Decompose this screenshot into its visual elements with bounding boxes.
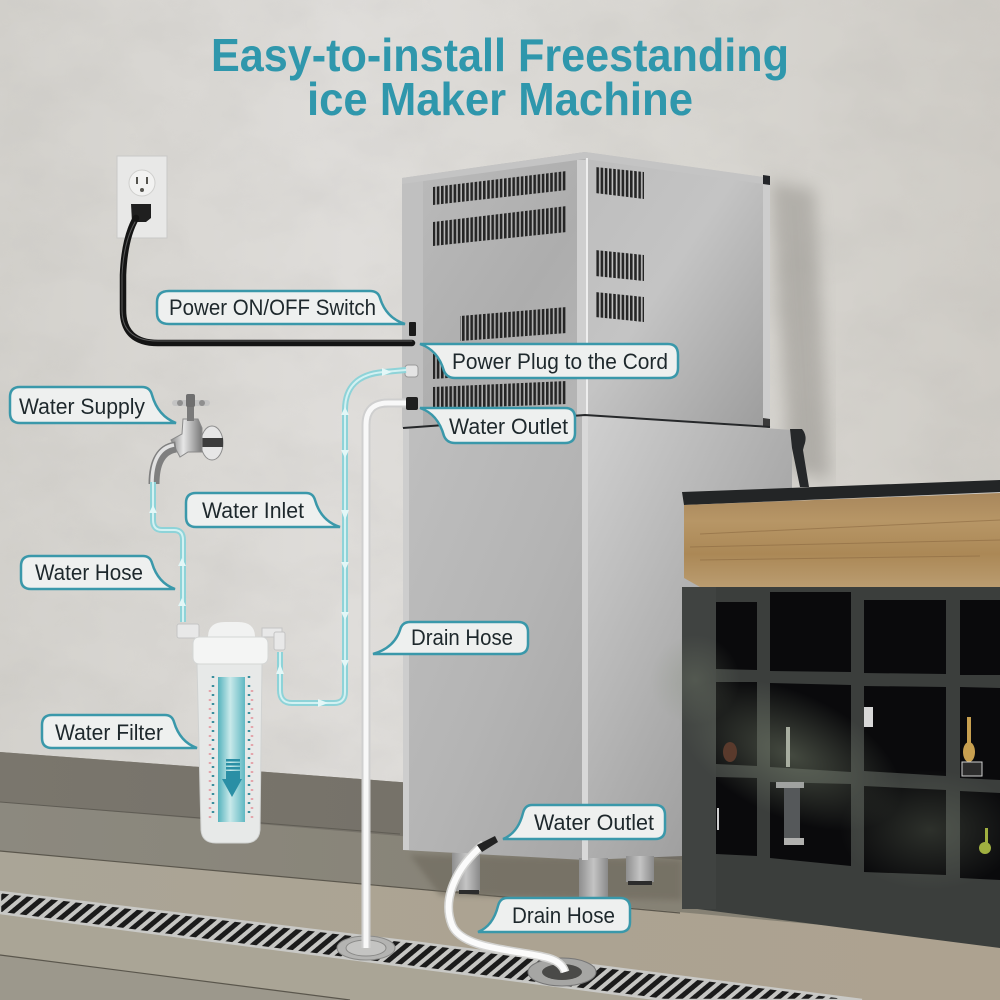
callout: Drain Hose bottom	[478, 898, 630, 932]
callout: Water Outlet bottom: Water Outlet	[534, 810, 654, 835]
reflected items	[717, 707, 991, 854]
corner caps	[763, 175, 770, 428]
callout: Water Supply: Water Supply	[19, 394, 145, 419]
callout: Power Plug to the Cord: Power Plug to the Cord	[452, 349, 668, 374]
second floor drain	[528, 958, 596, 986]
ice maker machine	[402, 152, 809, 897]
callout: Drain Hose bottom: Drain Hose	[512, 903, 615, 928]
top unit lid	[402, 152, 770, 184]
white drain hose: machine to floor drain	[366, 397, 418, 948]
outlet	[117, 156, 167, 238]
vents right face	[595, 167, 644, 322]
power switch	[409, 322, 416, 336]
callout: Power Plug to the Cord	[420, 344, 678, 378]
callout: Water Hose	[21, 556, 175, 589]
receptacle	[129, 170, 155, 196]
water hose: faucet to filter	[149, 482, 186, 622]
storage cabinet	[650, 480, 1000, 948]
water filter	[177, 622, 285, 843]
top unit, left face	[402, 152, 585, 428]
callout: Water Filter	[42, 715, 197, 748]
outlet connector	[406, 397, 418, 410]
green reflection haze	[655, 648, 925, 862]
spout	[154, 447, 176, 484]
machine shadow on wall	[770, 180, 830, 480]
callout: Power ON/OFF Switch	[157, 291, 405, 324]
faucet handle	[172, 394, 210, 421]
callout: Power ON/OFF Switch: Power ON/OFF Switch	[169, 295, 376, 320]
callout: Water Filter: Water Filter	[55, 720, 163, 745]
brackets and fittings	[177, 624, 285, 650]
wood front	[684, 493, 1000, 587]
faucet body	[171, 419, 202, 457]
power cord	[122, 218, 412, 343]
lower bin unit, right face	[585, 415, 792, 860]
callout: Drain Hose middle	[373, 622, 528, 654]
callout: Water Inlet: Water Inlet	[202, 498, 304, 523]
callout: Water Inlet	[186, 493, 340, 527]
callout: Water Supply	[10, 387, 176, 423]
cabinet compartments	[716, 592, 1000, 880]
wall plate	[117, 156, 167, 238]
lower bin unit, left face	[403, 415, 585, 860]
machine legs	[452, 853, 654, 897]
machine shadow on floor	[410, 855, 682, 900]
first floor drain flange	[337, 936, 395, 960]
bottom connector	[477, 836, 498, 852]
water inlet hose: filter to machine	[276, 368, 406, 707]
side handle	[790, 429, 809, 487]
plug	[131, 204, 151, 222]
callout: Water Outlet top	[420, 408, 575, 443]
wall flange	[201, 426, 223, 460]
filter housing	[197, 664, 262, 843]
callout: Drain Hose middle: Drain Hose	[411, 625, 513, 650]
callout: Water Outlet top: Water Outlet	[449, 414, 568, 439]
flow arrow	[222, 759, 242, 797]
background: concrete wall	[0, 0, 1000, 800]
bottom drain hose	[449, 836, 565, 972]
callout: Water Hose: Water Hose	[35, 560, 143, 585]
floor and baseboard	[0, 752, 1000, 1000]
callout: Water Outlet bottom	[503, 805, 665, 839]
title	[211, 29, 789, 125]
title: ice Maker Machine	[307, 73, 693, 125]
water inlet connector	[405, 365, 418, 377]
counter top	[682, 480, 1000, 505]
outer dotted media	[210, 676, 252, 820]
cabinet body	[682, 587, 1000, 948]
title: Easy-to-install Freestanding	[211, 29, 789, 81]
top unit, right face	[585, 152, 770, 427]
floor drain grate	[0, 892, 862, 1000]
cartridge	[218, 677, 245, 822]
vents left face	[433, 171, 567, 409]
filter cap	[193, 622, 268, 664]
faucet	[152, 394, 223, 484]
